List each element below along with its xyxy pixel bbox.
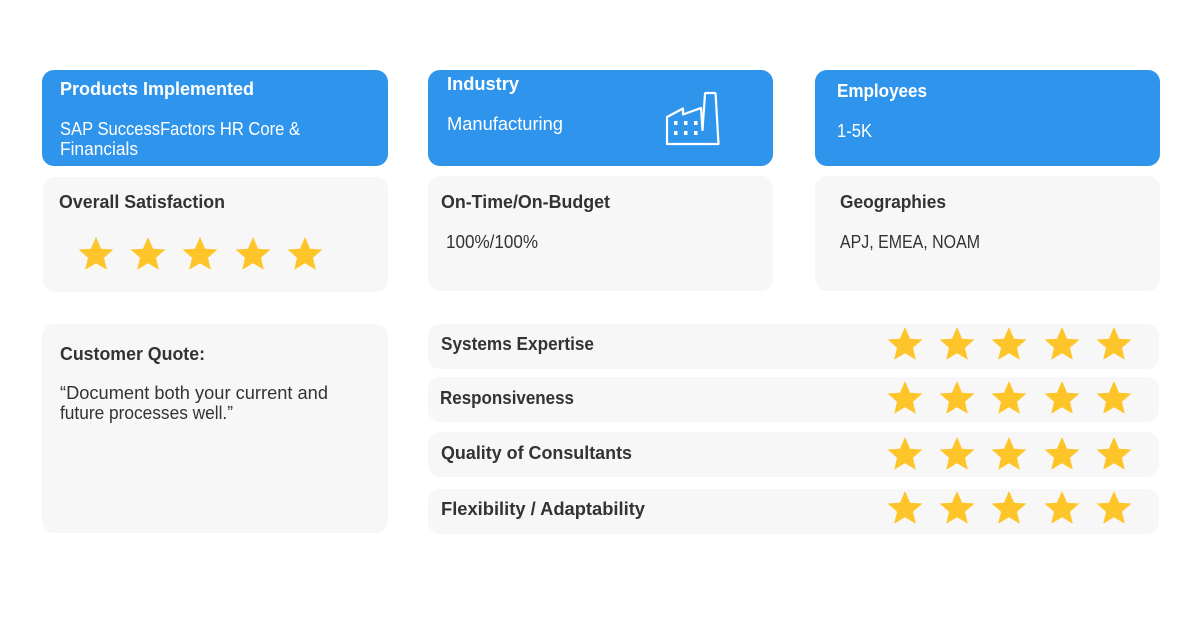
heading: overall satisfaction: Overall Satisfaction [59,192,225,212]
text: manufacturing: Manufacturing [447,114,563,134]
row: responsiveness [428,377,1159,422]
label: flexibility adaptability: Flexibility / Adaptability [441,499,645,519]
text: product names: SAP SuccessFactors HR Core & [60,119,300,139]
text: quote: “Document both your current and [60,383,328,403]
row: flexibility adaptability [428,489,1159,534]
panel: products implemented [42,70,388,166]
text: employee count: 1-5K [837,121,872,141]
star rating [888,491,1132,524]
panel: industry [428,70,773,166]
panel: customer quote [42,324,388,533]
heading: employees: Employees [837,81,927,101]
icon: factory [667,93,718,144]
text: quote [60,383,328,423]
panel: overall satisfaction [43,177,388,292]
label: responsiveness: Responsiveness [440,388,574,408]
text: regions: APJ, EMEA, NOAM [840,232,980,252]
text: quote: future processes well.” [60,403,233,423]
heading: geographies: Geographies [840,192,946,212]
label: quality of consultants: Quality of Consultants [441,443,632,463]
row: systems expertise [428,324,1159,369]
heading: customer quote: Customer Quote: [60,344,205,364]
text: product names: Financials [60,139,138,159]
panel: employees [815,70,1160,166]
star rating [78,237,322,270]
text: percentages: 100%/100% [446,232,538,252]
label: systems expertise: Systems Expertise [441,334,594,354]
panel: on-time on-budget [428,176,773,291]
star rating [888,437,1132,470]
panel: geographies [815,176,1160,291]
heading: industry: Industry [447,74,519,94]
star rating [888,381,1132,414]
star rating [888,327,1132,360]
heading: products implemented: Products Implemented [60,79,254,99]
text: product names [60,119,300,159]
row: quality of consultants [428,432,1159,477]
heading: on-time on-budget: On-Time/On-Budget [441,192,610,212]
